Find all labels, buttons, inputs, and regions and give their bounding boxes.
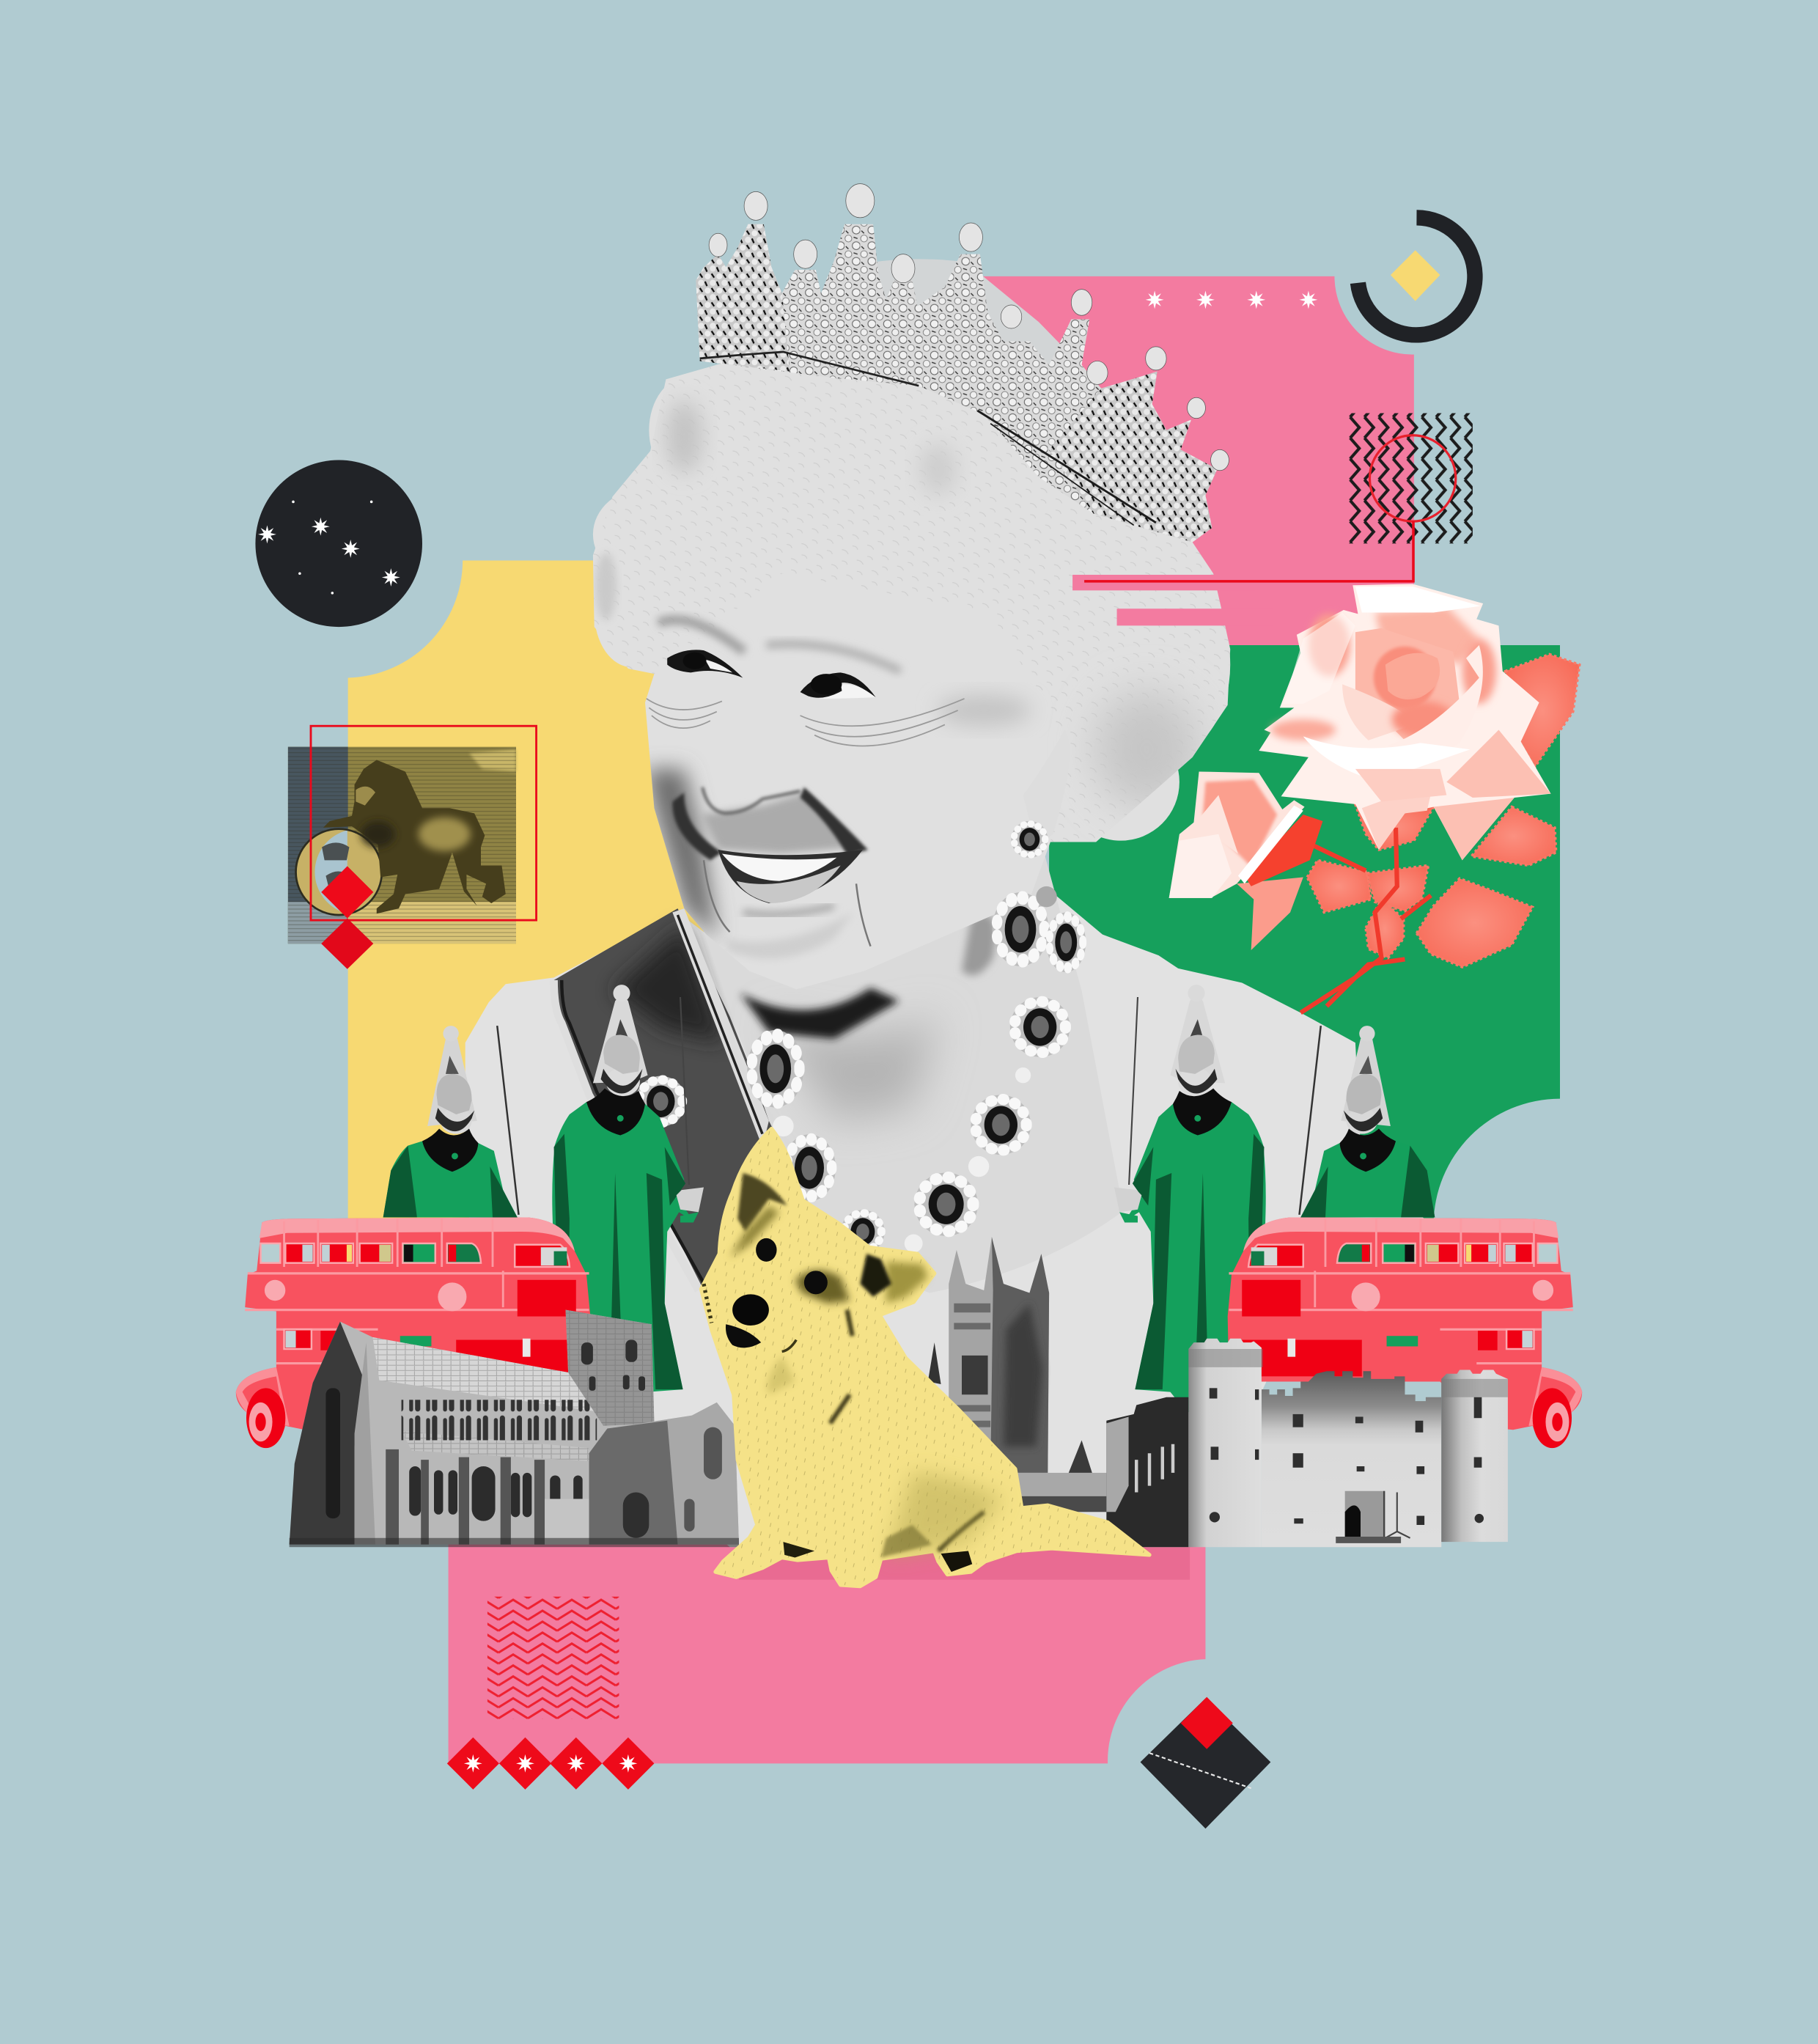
rose large bloom bbox=[1259, 584, 1551, 860]
corgi fur marks bbox=[830, 1310, 984, 1551]
icon: star row on pink bbox=[1146, 290, 1317, 309]
ear bbox=[1023, 730, 1070, 848]
building: dark palace bbox=[1106, 1397, 1188, 1547]
rose bbox=[1169, 584, 1580, 1012]
red diamonds bbox=[321, 866, 373, 969]
pattern: red zigzag square bbox=[487, 1597, 619, 1719]
cathedral tower bbox=[566, 1310, 654, 1426]
queen head and hair bbox=[593, 357, 1230, 989]
small blue gap by earring bbox=[1032, 853, 1048, 876]
icon: red star diamonds row bbox=[447, 1738, 654, 1790]
tiara bbox=[696, 184, 1229, 543]
queen mouth bbox=[718, 850, 863, 903]
queen nose bbox=[702, 787, 801, 813]
pattern: black zigzag square bbox=[1349, 413, 1473, 543]
brooch behind guard bbox=[636, 1076, 686, 1127]
guard: right inner bbox=[1114, 985, 1266, 1413]
queen face bbox=[647, 620, 1070, 946]
dome behind tiara bbox=[834, 259, 1134, 443]
red square outline bbox=[311, 726, 537, 920]
castle left tower bbox=[1188, 1339, 1262, 1547]
rose leaves bbox=[1307, 654, 1580, 967]
building: castle bbox=[1188, 1339, 1508, 1547]
rose inner petals bbox=[1355, 628, 1460, 743]
corgi bbox=[701, 1129, 1149, 1587]
tiara right cluster bbox=[1049, 372, 1217, 543]
lion medallion bbox=[296, 829, 382, 915]
guard: left inner bbox=[552, 985, 704, 1413]
necklace bbox=[747, 997, 1070, 1254]
lion picture ground bbox=[348, 902, 516, 944]
panel: yellow bbox=[348, 560, 704, 1251]
panel: pink bottom bbox=[449, 1545, 1205, 1763]
castle gate bbox=[1345, 1491, 1385, 1537]
pink bars over hair bbox=[1072, 575, 1273, 625]
queen smile creases bbox=[672, 793, 722, 860]
building: low range bbox=[1017, 1440, 1111, 1512]
cathedral west front dark bbox=[290, 1322, 365, 1545]
hair curls bbox=[593, 375, 1230, 841]
cathedral porch bbox=[545, 1499, 589, 1545]
castle windows bbox=[1210, 1388, 1484, 1525]
cathedral clerestory windows bbox=[402, 1400, 597, 1440]
tiara left cluster bbox=[696, 224, 790, 372]
jaw lines bbox=[704, 860, 871, 946]
bus: right bbox=[1228, 1217, 1582, 1448]
rose stem bbox=[1300, 828, 1431, 1012]
guard: right outer bbox=[1299, 1026, 1435, 1217]
tiara base lines bbox=[700, 352, 919, 386]
corgi muzzle edge bbox=[704, 1284, 712, 1323]
queen sash bbox=[554, 908, 782, 1290]
icon: yellow diamond bbox=[1391, 250, 1440, 301]
lion body bbox=[323, 760, 506, 913]
castle wall bbox=[1262, 1371, 1441, 1547]
castle right tower bbox=[1441, 1370, 1508, 1542]
guard: left outer bbox=[383, 1026, 519, 1217]
corgi eyes bbox=[756, 1238, 777, 1262]
queen upper lip shade bbox=[701, 793, 860, 853]
cathedral buttresses bbox=[386, 1449, 545, 1545]
icon: starry dark circle bbox=[255, 460, 422, 627]
rose small bloom bbox=[1169, 771, 1305, 898]
bus: left bbox=[236, 1217, 590, 1448]
building: central tower bbox=[928, 1237, 1049, 1473]
queen dress bbox=[465, 876, 1434, 1547]
queen eyebrows bbox=[658, 620, 744, 652]
queen neck and chest bbox=[704, 848, 1123, 1293]
icon: black diamond with red diamond bbox=[1141, 1697, 1270, 1828]
corgi ears shading bbox=[737, 1173, 787, 1232]
queen left eye bbox=[667, 650, 743, 677]
panel: green bbox=[1049, 645, 1560, 1225]
corgi paw bbox=[941, 1551, 972, 1572]
building: cathedral bbox=[290, 1310, 739, 1547]
queen right eye bbox=[808, 684, 876, 699]
corgi mouth bbox=[726, 1324, 761, 1348]
cathedral roof bbox=[372, 1337, 597, 1411]
icon: dark ring bbox=[1358, 218, 1475, 335]
collage illustration bbox=[236, 183, 1582, 1828]
red line frame bbox=[1084, 521, 1413, 581]
panel: darker pink strip under corgi bbox=[739, 1545, 1190, 1580]
cathedral transept bbox=[589, 1403, 739, 1545]
lion picture light sky bbox=[469, 749, 516, 771]
corgi nose bbox=[732, 1294, 769, 1326]
cathedral lower windows bbox=[409, 1466, 583, 1521]
panel: pink top bbox=[980, 276, 1414, 645]
earring bbox=[993, 821, 1086, 972]
tiara stones bbox=[709, 184, 1229, 471]
tiara main shape bbox=[696, 224, 1217, 543]
wrinkles bbox=[647, 699, 965, 746]
lion picture bbox=[288, 747, 516, 944]
